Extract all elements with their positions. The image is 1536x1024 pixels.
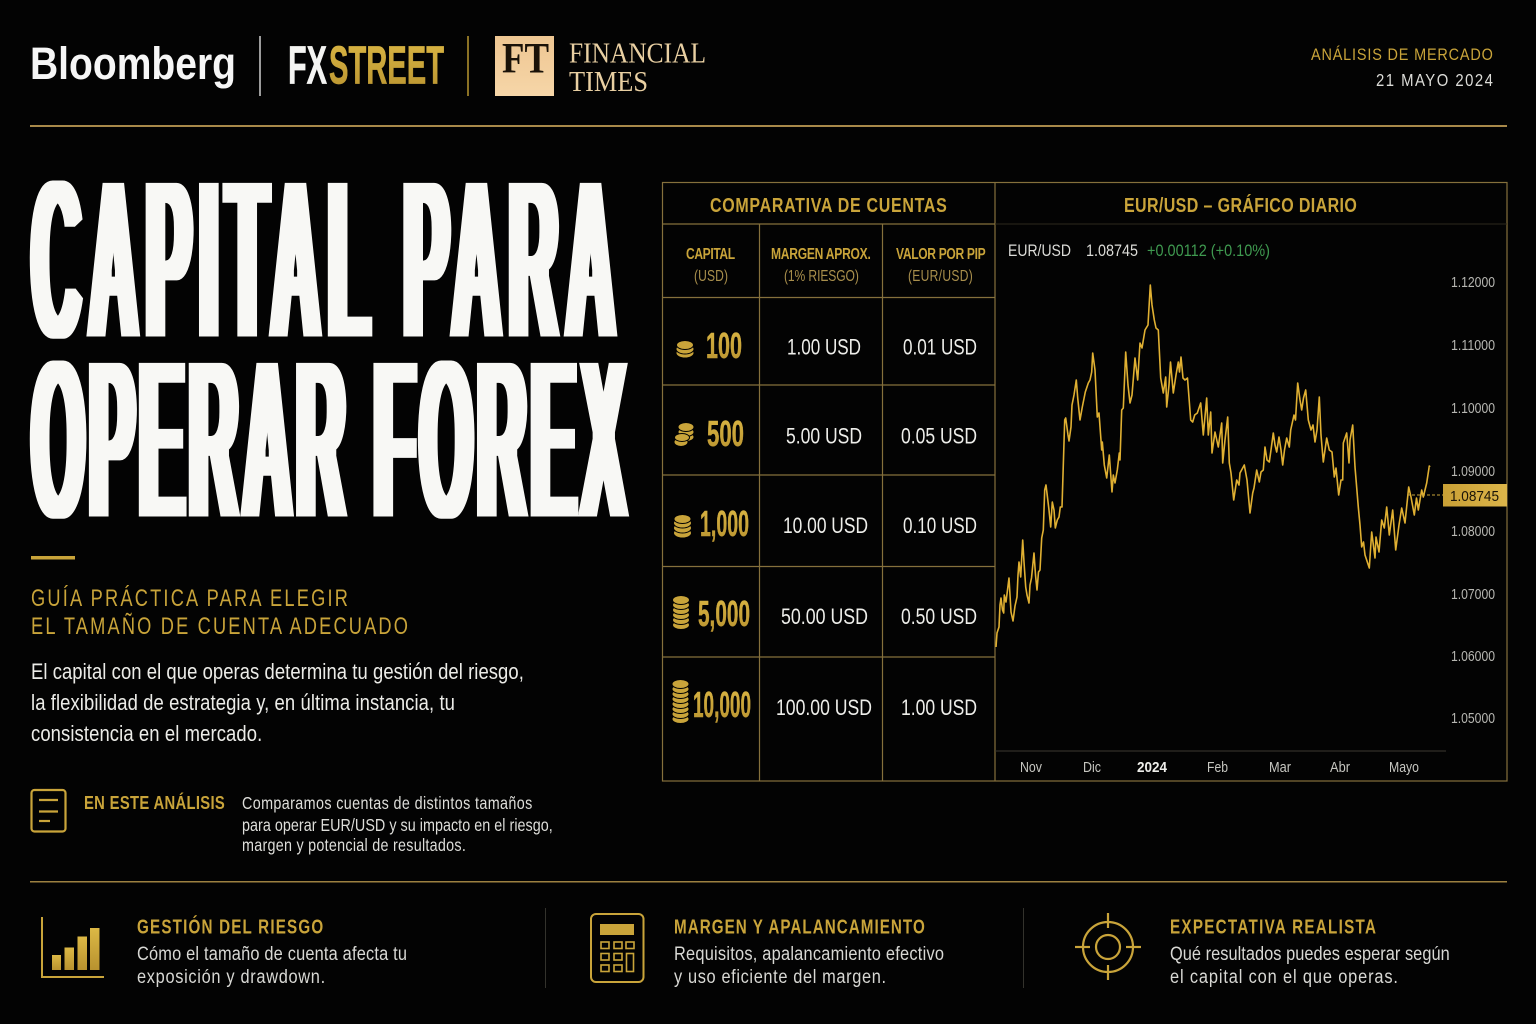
row: 5,000: 0.50 USD bbox=[901, 604, 977, 629]
feature: gestión del riesgo: Cómo el tamaño de cuenta afecta tu bbox=[137, 943, 407, 964]
logo: FXStreet: FX bbox=[288, 36, 327, 96]
header: logos bbox=[30, 36, 706, 98]
header: date block bbox=[1311, 44, 1493, 90]
table heading: COMPARATIVA DE CUENTAS bbox=[710, 194, 947, 216]
feature: margen y apalancamiento: y uso eficiente del margen. bbox=[674, 966, 886, 987]
icon: coins bbox=[674, 422, 694, 446]
header: date block: ANÁLISIS DE MERCADO bbox=[1311, 44, 1493, 64]
column headers: VALOR POR PIP bbox=[896, 245, 986, 262]
feature: gestión del riesgo: exposición y drawdown. bbox=[137, 966, 325, 987]
logo: FXStreet: STREET bbox=[329, 36, 444, 96]
y axis labels: 1.09000 bbox=[1451, 464, 1495, 480]
feature: expectativa realista: EXPECTATIVA REALISTA bbox=[1170, 915, 1376, 938]
x axis labels: 2024 bbox=[1137, 760, 1167, 776]
feature: expectativa realista bbox=[1075, 913, 1450, 987]
feature: margen y apalancamiento: Requisitos, apalancamiento efectivo bbox=[674, 943, 944, 964]
row: 10,000 bbox=[672, 680, 977, 725]
row: 1,000: 10.00 USD bbox=[783, 513, 868, 538]
column headers: CAPITAL bbox=[686, 245, 736, 262]
y axis labels: 1.12000 bbox=[1451, 275, 1495, 291]
logo: Financial Times: TIMES bbox=[569, 67, 648, 98]
icon: coins bbox=[672, 680, 689, 724]
y axis labels: 1.08000 bbox=[1451, 524, 1495, 540]
row: 100: 1.00 USD bbox=[787, 334, 861, 360]
row: 10,000: 100.00 USD bbox=[776, 695, 872, 720]
chart quote: 1.08745 bbox=[1086, 241, 1138, 260]
y axis labels: 1.07000 bbox=[1451, 587, 1495, 603]
row: 10,000: 10,000 bbox=[693, 684, 751, 725]
x axis labels: Abr bbox=[1330, 760, 1350, 776]
x axis labels: Dic bbox=[1083, 760, 1101, 776]
intro paragraph: consistencia en el mercado. bbox=[31, 721, 262, 746]
feature: gestión del riesgo: GESTIÓN DEL RIESGO bbox=[137, 914, 323, 938]
logo: Bloomberg: Bloomberg bbox=[30, 38, 236, 89]
icon: target bbox=[1075, 913, 1141, 980]
row: 100 bbox=[676, 325, 977, 366]
column headers: (USD) bbox=[694, 267, 728, 284]
y axis labels bbox=[1451, 275, 1495, 727]
icon: bar chart bbox=[42, 917, 104, 977]
feature: margen y apalancamiento: MARGEN Y APALANCAMIENTO bbox=[674, 915, 925, 938]
panel: gráfico EUR/USD bbox=[995, 193, 1507, 776]
chart quote: +0.00112 (+0.10%) bbox=[1147, 241, 1270, 260]
logo: FXStreet bbox=[288, 36, 444, 96]
row: 500: 500 bbox=[707, 413, 744, 454]
row: 1,000: 0.10 USD bbox=[903, 513, 977, 538]
row: 500 bbox=[674, 413, 977, 454]
column headers: (EUR/USD) bbox=[908, 267, 973, 284]
en este análisis: EN ESTE ANÁLISIS bbox=[84, 792, 225, 813]
chart quote: EUR/USD bbox=[1008, 241, 1071, 260]
row: 5,000: 5,000 bbox=[698, 593, 750, 634]
en este análisis: margen y potencial de resultados. bbox=[242, 837, 466, 855]
subtitle bbox=[31, 583, 408, 640]
column headers: (1% RIESGO) bbox=[784, 267, 859, 284]
subtitle: GUÍA PRÁCTICA PARA ELEGIR bbox=[31, 583, 348, 612]
y axis labels: 1.11000 bbox=[1451, 338, 1495, 354]
row: 500: 5.00 USD bbox=[786, 424, 862, 448]
en este análisis: Comparamos cuentas de distintos tamaños bbox=[242, 795, 532, 813]
logo: Financial Times: FT bbox=[502, 36, 549, 82]
intro paragraph: la flexibilidad de estrategia y, en última instancia, tu bbox=[31, 690, 455, 715]
icon: coins bbox=[674, 514, 692, 538]
y axis labels: 1.10000 bbox=[1451, 401, 1495, 417]
header: date block: 21 MAYO 2024 bbox=[1376, 71, 1493, 90]
logo: Financial Times: FINANCIAL bbox=[569, 38, 706, 70]
row: 100: 0.01 USD bbox=[903, 334, 977, 360]
en este análisis bbox=[84, 792, 553, 855]
icon: calculator bbox=[591, 914, 644, 982]
panel: comparativa de cuentas bbox=[662, 182, 1507, 781]
logo: Financial Times bbox=[495, 36, 706, 98]
icon: coins bbox=[672, 596, 690, 630]
intro paragraph: El capital con el que operas determina tu gestión del riesgo, bbox=[31, 659, 524, 684]
chart quote bbox=[1008, 241, 1270, 260]
chart heading: EUR/USD – GRÁFICO DIARIO bbox=[1124, 193, 1357, 216]
title bbox=[32, 130, 626, 570]
column headers bbox=[686, 245, 986, 284]
title: OPERAR FOREX bbox=[32, 310, 626, 570]
row: 500: 0.05 USD bbox=[901, 424, 977, 448]
icon: document bbox=[32, 790, 66, 832]
x axis labels: Mayo bbox=[1389, 760, 1419, 776]
current price tag: 1.08745 bbox=[1450, 488, 1499, 505]
y axis labels: 1.06000 bbox=[1451, 649, 1495, 665]
row: 1,000 bbox=[674, 503, 977, 544]
x axis labels: Mar bbox=[1269, 760, 1291, 776]
row: 10,000: 1.00 USD bbox=[901, 695, 977, 720]
title: CAPITAL PARA bbox=[32, 130, 615, 390]
intro paragraph bbox=[31, 659, 524, 746]
x axis labels: Feb bbox=[1207, 760, 1228, 776]
feature: expectativa realista: Qué resultados puedes esperar según bbox=[1170, 943, 1450, 964]
feature: gestión del riesgo bbox=[42, 914, 407, 987]
column headers: MARGEN APROX. bbox=[771, 245, 871, 262]
x axis labels: Nov bbox=[1020, 760, 1043, 776]
price line chart bbox=[996, 285, 1430, 647]
current price tag bbox=[1407, 484, 1507, 506]
feature: margen y apalancamiento bbox=[591, 914, 944, 987]
row: 5,000 bbox=[672, 593, 977, 634]
icon: coins bbox=[676, 340, 694, 358]
row: 100: 100 bbox=[706, 325, 742, 366]
subtitle: EL TAMAÑO DE CUENTA ADECUADO bbox=[31, 611, 408, 640]
row: 1,000: 1,000 bbox=[700, 503, 749, 544]
feature: expectativa realista: el capital con el que operas. bbox=[1170, 966, 1398, 987]
row: 5,000: 50.00 USD bbox=[781, 604, 868, 629]
y axis labels: 1.05000 bbox=[1451, 711, 1495, 727]
en este análisis: para operar EUR/USD y su impacto en el riesgo, bbox=[242, 817, 553, 835]
x axis labels bbox=[1020, 760, 1419, 776]
